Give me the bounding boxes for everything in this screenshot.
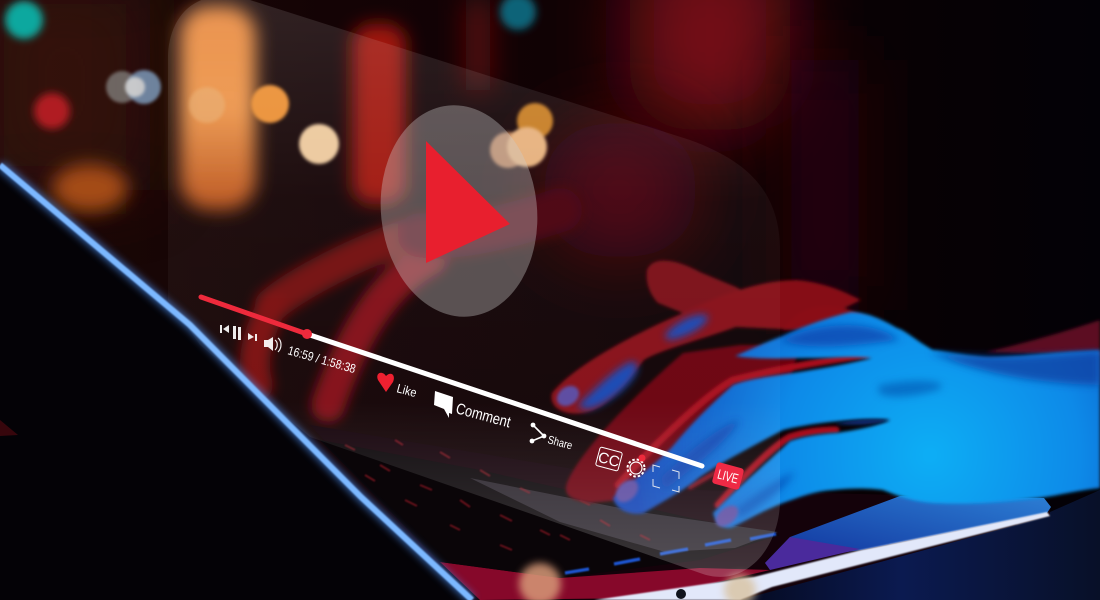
keyboard — [320, 440, 780, 578]
blue hand — [613, 312, 1100, 528]
red finger rims — [618, 354, 872, 505]
live badge — [712, 462, 744, 490]
share — [530, 423, 573, 452]
closed captions: CC — [596, 449, 622, 471]
glass video panel — [168, 0, 780, 577]
fingernails — [553, 382, 742, 530]
laptop silver front edge — [594, 512, 1050, 600]
play button — [370, 97, 548, 325]
playback controls — [220, 325, 281, 352]
live badge: LIVE — [716, 467, 740, 486]
settings gear — [628, 454, 646, 476]
hand — [551, 260, 1100, 530]
fullscreen — [653, 465, 679, 492]
laptop screen lid — [0, 165, 472, 600]
progress bar — [201, 297, 702, 466]
comment — [434, 391, 513, 432]
blurred left hand — [255, 210, 560, 405]
background desk surface — [740, 490, 1100, 600]
time text: 16:59 / 1:58:38 — [286, 343, 357, 376]
video player UI — [201, 97, 744, 492]
finger highlights and shading — [578, 315, 1100, 518]
red hand underside — [551, 260, 1100, 503]
bottom lights — [519, 563, 561, 600]
like: Like — [395, 381, 418, 400]
like — [377, 373, 418, 400]
comment: Comment — [454, 400, 513, 432]
laptop base deck — [310, 425, 1051, 600]
share: Share — [546, 434, 573, 452]
